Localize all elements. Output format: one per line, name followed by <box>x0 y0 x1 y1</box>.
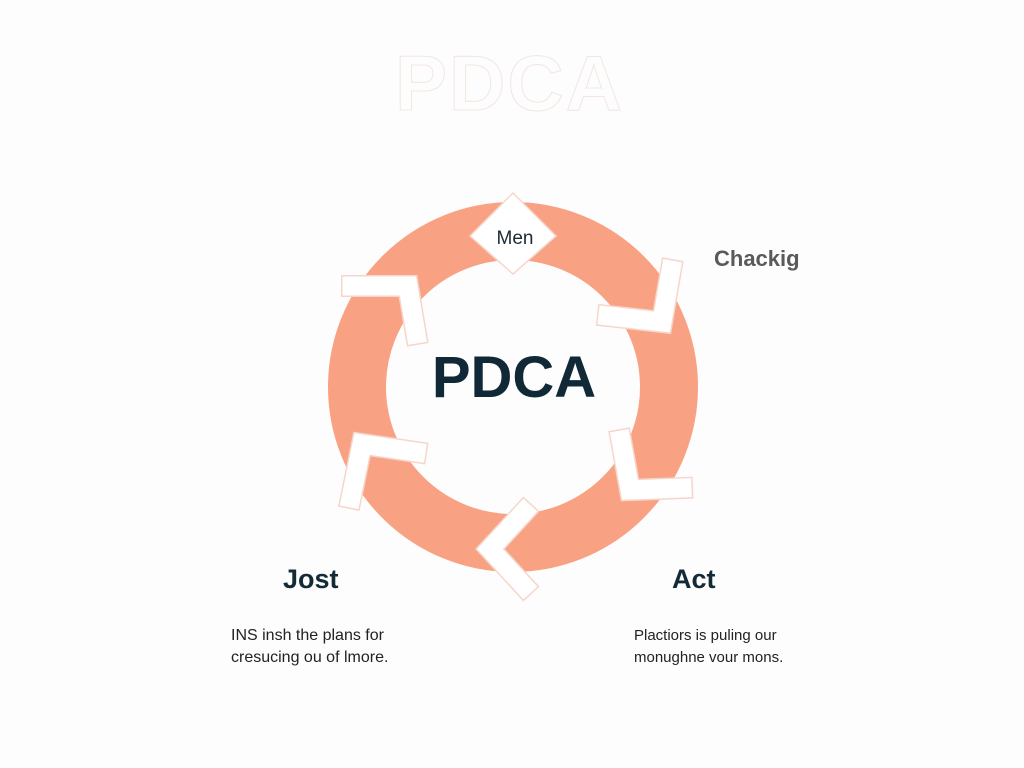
arrow bracket: top-left <box>352 286 416 334</box>
heading: Jost: Jost <box>283 564 339 594</box>
text: Act description: Plactiors is puling our <box>634 627 777 644</box>
text: Jost description <box>231 627 388 666</box>
arrow bracket: left-bottom <box>351 444 416 498</box>
text: Jost description: INS insh the plans for <box>231 627 384 644</box>
arrow bracket: top-right <box>608 270 671 322</box>
text: Act description: monughne vour mons. <box>634 649 783 666</box>
title: faint outlined PDCA: PDCA <box>395 39 624 127</box>
arrow bracket: bottom <box>490 512 524 586</box>
heading: Act: Act <box>672 564 716 594</box>
diamond label: Men <box>470 193 556 274</box>
label: Chackig: Chackig <box>714 246 800 271</box>
text: Jost description: cresucing ou of lmore. <box>231 649 388 666</box>
arrow bracket: right-bottom <box>621 440 682 490</box>
diamond label: Men: Men <box>497 228 533 249</box>
ring <box>357 231 669 543</box>
center label: PDCA <box>432 345 596 410</box>
text: Act description <box>634 627 783 666</box>
